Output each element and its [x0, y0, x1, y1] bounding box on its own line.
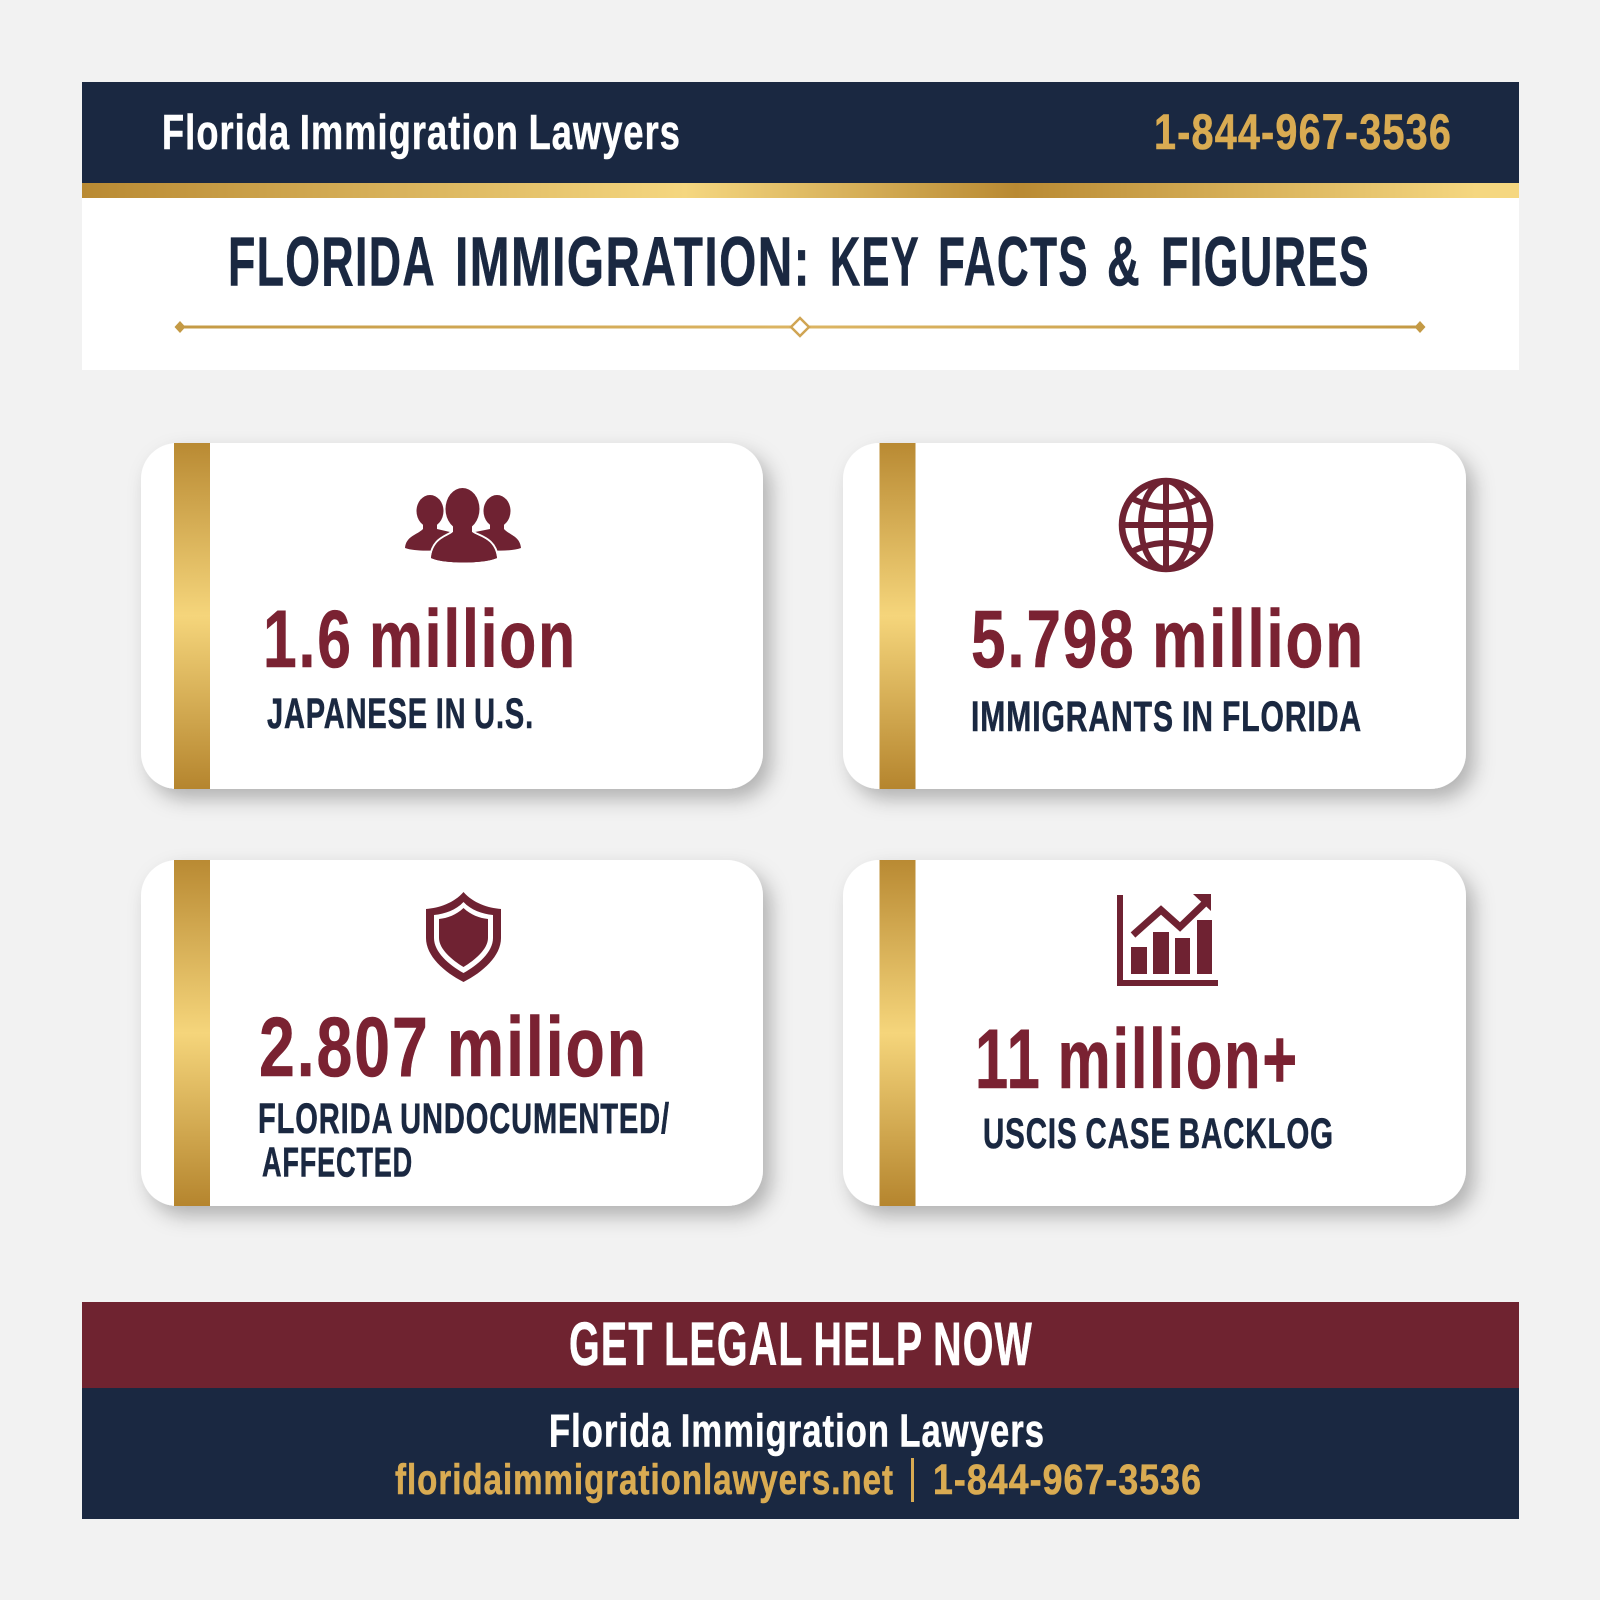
stat label: USCIS CASE BACKLOG [983, 1110, 1334, 1158]
icon: bar chart with rising arrow [1117, 894, 1218, 986]
title [228, 222, 1370, 300]
header phone number: 1-844-967-3536 [1154, 104, 1452, 160]
stat label [258, 1095, 670, 1186]
gold accent bar [174, 443, 210, 789]
header company name: Florida Immigration Lawyers [162, 106, 681, 160]
gold accent bar [880, 860, 916, 1206]
ornamental divider [174, 318, 1426, 336]
header bar [82, 82, 1519, 183]
stat value: 11 million+ [975, 1012, 1299, 1106]
icon: globe [1121, 480, 1211, 570]
title: FACTS [938, 222, 1089, 300]
panel: Japanese in U.S. [141, 443, 763, 789]
footer company name: Florida Immigration Lawyers [549, 1404, 1045, 1456]
title: IMMIGRATION: [455, 222, 811, 300]
stat label: JAPANESE IN U.S. [267, 690, 534, 738]
stat value: 5.798 million [971, 594, 1365, 685]
footer panel [82, 1388, 1519, 1519]
stat label: AFFECTED [262, 1138, 413, 1186]
gold accent bar [880, 443, 916, 789]
footer separator [911, 1458, 914, 1502]
title: KEY [830, 222, 920, 300]
gold ribbon [82, 183, 1519, 198]
call to action text: GET LEGAL HELP NOW [569, 1310, 1033, 1378]
title: FLORIDA [228, 222, 436, 300]
panel: Florida undocumented [141, 860, 763, 1206]
title: & [1107, 222, 1141, 300]
footer phone number: 1-844-967-3536 [933, 1456, 1202, 1504]
title: FIGURES [1161, 222, 1370, 300]
gold accent bar [174, 860, 210, 1206]
title panel [82, 198, 1519, 370]
stat label: IMMIGRANTS IN FLORIDA [971, 693, 1362, 741]
stat label: FLORIDA UNDOCUMENTED/ [258, 1095, 670, 1143]
icon: shield [426, 892, 501, 982]
stat value: 2.807 milion [259, 1000, 648, 1094]
panel: USCIS case backlog [843, 860, 1466, 1206]
footer website: floridaimmigrationlawyers.net [395, 1456, 894, 1504]
call to action banner [82, 1302, 1519, 1388]
stat value: 1.6 million [263, 594, 577, 685]
panel: immigrants in Florida [843, 443, 1466, 789]
icon: people [405, 488, 521, 562]
